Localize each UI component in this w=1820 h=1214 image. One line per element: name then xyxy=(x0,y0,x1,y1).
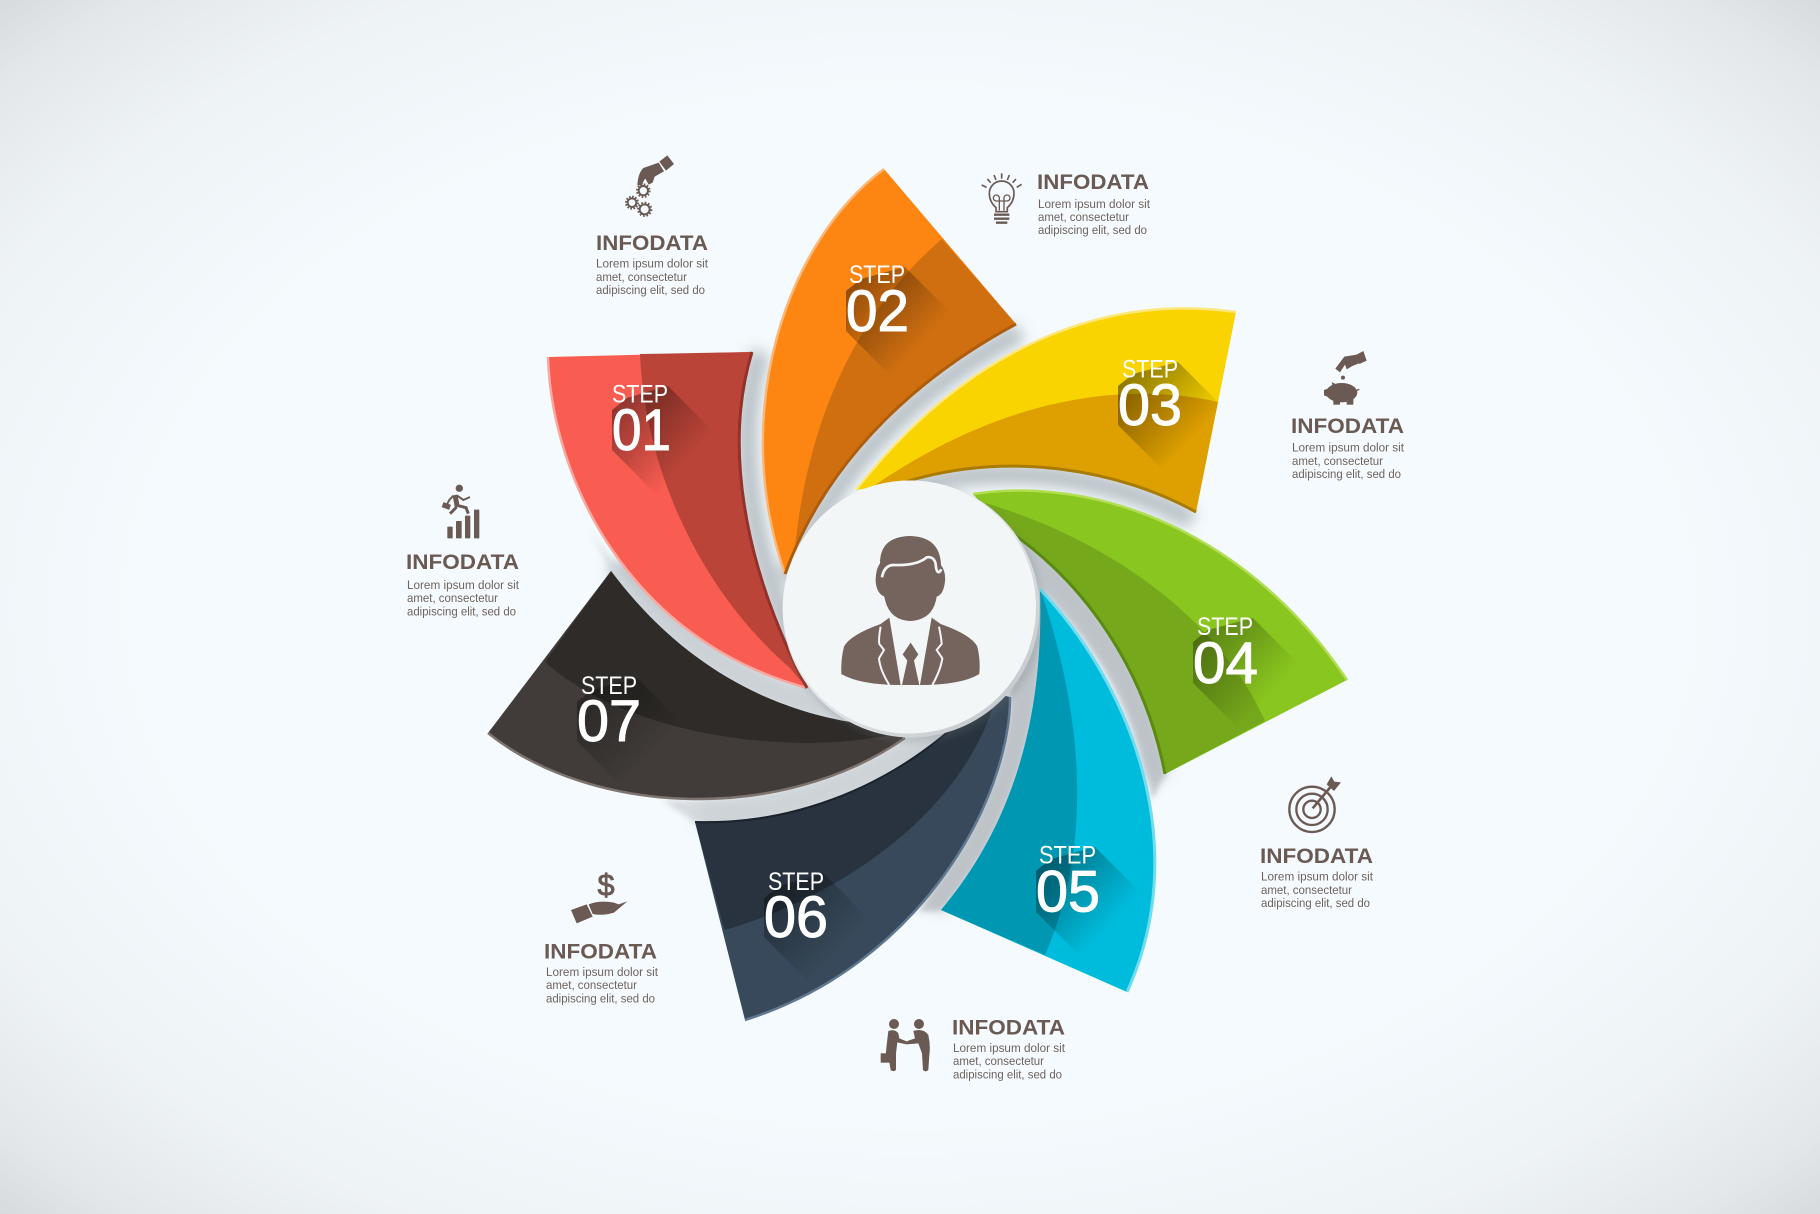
info block: runner on bars xyxy=(406,485,520,618)
info block: target: adipiscing elit, sed do xyxy=(1261,896,1370,910)
icon: businessman xyxy=(841,536,980,685)
info block: target: Lorem ipsum dolor sit xyxy=(1261,870,1374,884)
petal: step 04 xyxy=(973,491,1347,774)
info block: gears: INFODATA xyxy=(596,232,708,255)
petal: step 07 xyxy=(488,571,905,799)
info block: piggy bank: Lorem ipsum dolor sit xyxy=(1292,440,1405,454)
label: step 02: STEP xyxy=(849,261,905,289)
info block: gears: amet, consectetur xyxy=(596,270,687,284)
info block: handshake: Lorem ipsum dolor sit xyxy=(953,1041,1066,1055)
info block: piggy bank: adipiscing elit, sed do xyxy=(1292,467,1401,481)
label: step 01: STEP xyxy=(612,380,668,408)
petal: step 06 xyxy=(695,690,1010,1020)
info block: dollar hand: amet, consectetur xyxy=(546,978,637,992)
info block: piggy bank xyxy=(1291,351,1405,481)
info block: light bulb: adipiscing elit, sed do xyxy=(1038,223,1147,237)
icon: runner on bar chart xyxy=(442,485,479,538)
label: step 06: 06 xyxy=(764,885,828,950)
label: step 05: STEP xyxy=(1039,842,1096,870)
label: step 04: STEP xyxy=(1197,613,1253,641)
info block: gears xyxy=(596,155,709,297)
label: step 07: STEP xyxy=(581,672,637,700)
label: step 05: 05 xyxy=(1036,860,1100,924)
label: step 03: STEP xyxy=(1122,356,1178,384)
info block: handshake: adipiscing elit, sed do xyxy=(953,1068,1062,1082)
label: step 07: 07 xyxy=(577,689,641,754)
label: step 06: STEP xyxy=(768,868,824,896)
info block: piggy bank: INFODATA xyxy=(1291,415,1404,438)
icon: target with arrow xyxy=(1289,776,1341,832)
info block: light bulb: Lorem ipsum dolor sit xyxy=(1038,197,1151,211)
icon: piggy bank xyxy=(1324,351,1367,405)
info block: runner on bars: adipiscing elit, sed do xyxy=(407,604,516,618)
label: step 02: 02 xyxy=(846,279,909,344)
info block: runner on bars: Lorem ipsum dolor sit xyxy=(407,578,520,592)
info block: runner on bars: amet, consectetur xyxy=(407,591,498,605)
info block: runner on bars: INFODATA xyxy=(406,551,519,574)
info block: target xyxy=(1260,776,1374,910)
info block: light bulb: amet, consectetur xyxy=(1038,210,1129,224)
label: step 03: 03 xyxy=(1118,373,1182,438)
icon: hand with dollar: $ xyxy=(597,868,615,902)
info block: light bulb: INFODATA xyxy=(1037,171,1149,194)
info block: dollar hand: INFODATA xyxy=(544,940,657,964)
icon: hand with gears xyxy=(626,155,674,216)
label: step 01: 01 xyxy=(612,398,671,463)
petal: step 02 xyxy=(763,169,1016,574)
info block: gears: Lorem ipsum dolor sit xyxy=(596,256,709,270)
icon: handshake xyxy=(881,1019,930,1071)
petal: step 01 xyxy=(548,352,807,688)
petal: step 05 xyxy=(941,589,1155,992)
icon: light bulb xyxy=(982,173,1022,223)
info block: dollar hand: adipiscing elit, sed do xyxy=(546,992,655,1006)
info block: handshake: INFODATA xyxy=(952,1016,1065,1040)
info block: dollar hand xyxy=(544,868,659,1006)
label: step 04: 04 xyxy=(1193,631,1258,696)
info block: light bulb xyxy=(982,171,1151,237)
info block: handshake xyxy=(881,1016,1066,1082)
petal: step 03 xyxy=(856,308,1236,512)
info block: target: INFODATA xyxy=(1260,845,1373,868)
info block: target: amet, consectetur xyxy=(1261,883,1352,897)
info block: piggy bank: amet, consectetur xyxy=(1292,454,1383,468)
info block: gears: adipiscing elit, sed do xyxy=(596,283,705,297)
info block: dollar hand: Lorem ipsum dolor sit xyxy=(546,965,659,979)
center circle with person xyxy=(782,480,1040,738)
info block: handshake: amet, consectetur xyxy=(953,1054,1044,1068)
